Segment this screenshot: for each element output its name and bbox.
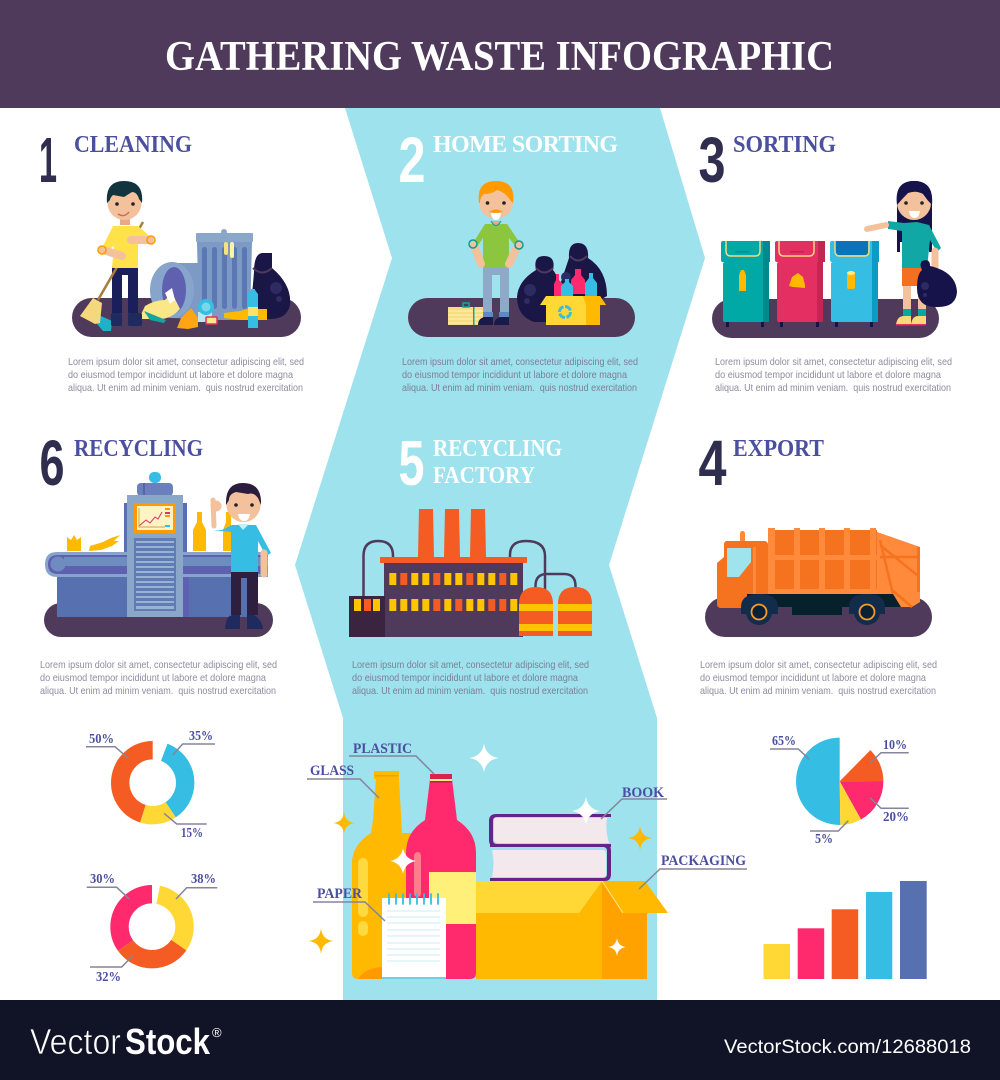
logo text bold: Stock <box>125 1021 211 1062</box>
heading: sorting: SORTING <box>733 132 836 158</box>
pie chart: 65 10 20 5: 20% <box>883 809 909 824</box>
donut chart: 30 38 32: 32% <box>96 969 121 984</box>
icon: notepad <box>382 894 446 979</box>
text block: do eiusmod tempor incididunt ut labore et dolore magna <box>715 370 941 381</box>
text block: do eiusmod tempor incididunt ut labore et dolore magna <box>68 370 293 381</box>
number 1: 1 <box>39 124 57 196</box>
title: GATHERING WASTE INFOGRAPHIC <box>165 34 834 80</box>
text block: Lorem ipsum dolor sit amet, consectetur adipiscing elit, sed <box>68 357 304 368</box>
text block: Lorem ipsum dolor sit amet, consectetur adipiscing elit, sed <box>352 660 589 671</box>
footer bar <box>0 1000 1000 1080</box>
material labels: PACKAGING <box>661 853 746 869</box>
text block: Lorem ipsum dolor sit amet, consectetur adipiscing elit, sed <box>715 357 952 368</box>
illustration: garbage truck <box>705 528 932 637</box>
donut chart: 50 35 15: 15% <box>181 825 203 840</box>
text block: Lorem ipsum dolor sit amet, consectetur adipiscing elit, sed <box>402 357 638 368</box>
number 4: 4 <box>698 427 727 499</box>
text block <box>68 357 304 394</box>
pie chart: 65 10 20 5: 5% <box>815 831 833 846</box>
pie chart: 65 10 20 5 <box>770 733 909 846</box>
icon: plastic bottle <box>406 774 476 979</box>
text block <box>40 660 277 697</box>
donut chart: 50 35 15: 50% <box>89 731 114 746</box>
material labels: BOOK <box>622 785 664 801</box>
text block: Lorem ipsum dolor sit amet, consectetur adipiscing elit, sed <box>40 660 277 671</box>
text block <box>352 660 589 697</box>
material labels <box>307 741 747 921</box>
text block <box>715 357 952 394</box>
donut chart: 50 35 15 <box>86 728 215 840</box>
materials illustration: bottles, books, box, notepad <box>307 741 747 979</box>
donut chart: 30 38 32 <box>87 871 217 984</box>
donut chart: 30 38 32: 30% <box>90 871 115 886</box>
icon: packaging box <box>476 881 668 979</box>
text block <box>700 660 937 697</box>
pie chart: 65 10 20 5: 65% <box>772 733 796 748</box>
illustration: man with bags and recycling box <box>408 181 635 337</box>
logo text: Vector <box>30 1021 121 1062</box>
number 6: 6 <box>40 427 64 499</box>
heading: recycling: RECYCLING <box>74 436 203 462</box>
bar chart <box>764 881 927 979</box>
header banner <box>0 0 1000 108</box>
registered mark: ® <box>212 1025 222 1040</box>
sparkles <box>308 744 652 956</box>
blue zigzag background band <box>295 108 705 1000</box>
heading: recycling factory: RECYCLING <box>433 436 562 462</box>
text block: do eiusmod tempor incididunt ut labore et dolore magna <box>40 673 266 684</box>
text block: do eiusmod tempor incididunt ut labore et dolore magna <box>700 673 926 684</box>
number 3: 3 <box>698 124 726 196</box>
donut chart: 50 35 15: 35% <box>189 728 213 743</box>
material labels: GLASS <box>310 763 354 779</box>
text block: aliqua. Ut enim ad minim veniam. quis nostrud exercitation <box>715 383 951 394</box>
panel: step 5 recycling factory <box>349 427 592 697</box>
pie chart: 65 10 20 5: 10% <box>883 737 907 752</box>
icon: glass bottle <box>352 771 420 979</box>
material labels: PLASTIC <box>353 741 412 757</box>
illustration: boy sweeping beside trash bins <box>72 181 301 337</box>
text block: do eiusmod tempor incididunt ut labore et dolore magna <box>352 673 578 684</box>
illustration: conveyor machine and man <box>44 472 273 637</box>
heading: recycling factory <box>433 436 562 489</box>
illustration: factory with chimneys and tanks <box>349 509 592 637</box>
illustration: girl and three sorting bins <box>712 181 957 338</box>
text block: aliqua. Ut enim ad minim veniam. quis nostrud exercitation <box>68 383 303 394</box>
text block: aliqua. Ut enim ad minim veniam. quis nostrud exercitation <box>40 686 276 697</box>
text block: do eiusmod tempor incididunt ut labore et dolore magna <box>402 370 627 381</box>
text block: aliqua. Ut enim ad minim veniam. quis nostrud exercitation <box>352 686 588 697</box>
number 2: 2 <box>398 124 426 196</box>
panel: step 1 cleaning <box>39 124 304 394</box>
panel: step 3 sorting <box>698 124 957 394</box>
heading: home sorting: HOME SORTING <box>433 132 618 158</box>
text block <box>402 357 638 394</box>
donut chart: 30 38 32: 38% <box>191 871 216 886</box>
text block: aliqua. Ut enim ad minim veniam. quis nostrud exercitation <box>402 383 637 394</box>
heading: recycling factory: FACTORY <box>433 463 535 489</box>
material labels: PAPER <box>317 886 362 902</box>
panel: step 6 recycling <box>40 427 277 697</box>
text block: Lorem ipsum dolor sit amet, consectetur adipiscing elit, sed <box>700 660 937 671</box>
panel: step 2 home sorting <box>398 124 638 394</box>
text block: aliqua. Ut enim ad minim veniam. quis nostrud exercitation <box>700 686 936 697</box>
panel: step 4 export <box>698 427 937 697</box>
icon: books <box>489 814 611 881</box>
heading: export: EXPORT <box>733 436 824 462</box>
heading: cleaning: CLEANING <box>74 132 192 158</box>
image id: VectorStock.com/12688018 <box>724 1036 971 1058</box>
number 5: 5 <box>398 427 424 499</box>
